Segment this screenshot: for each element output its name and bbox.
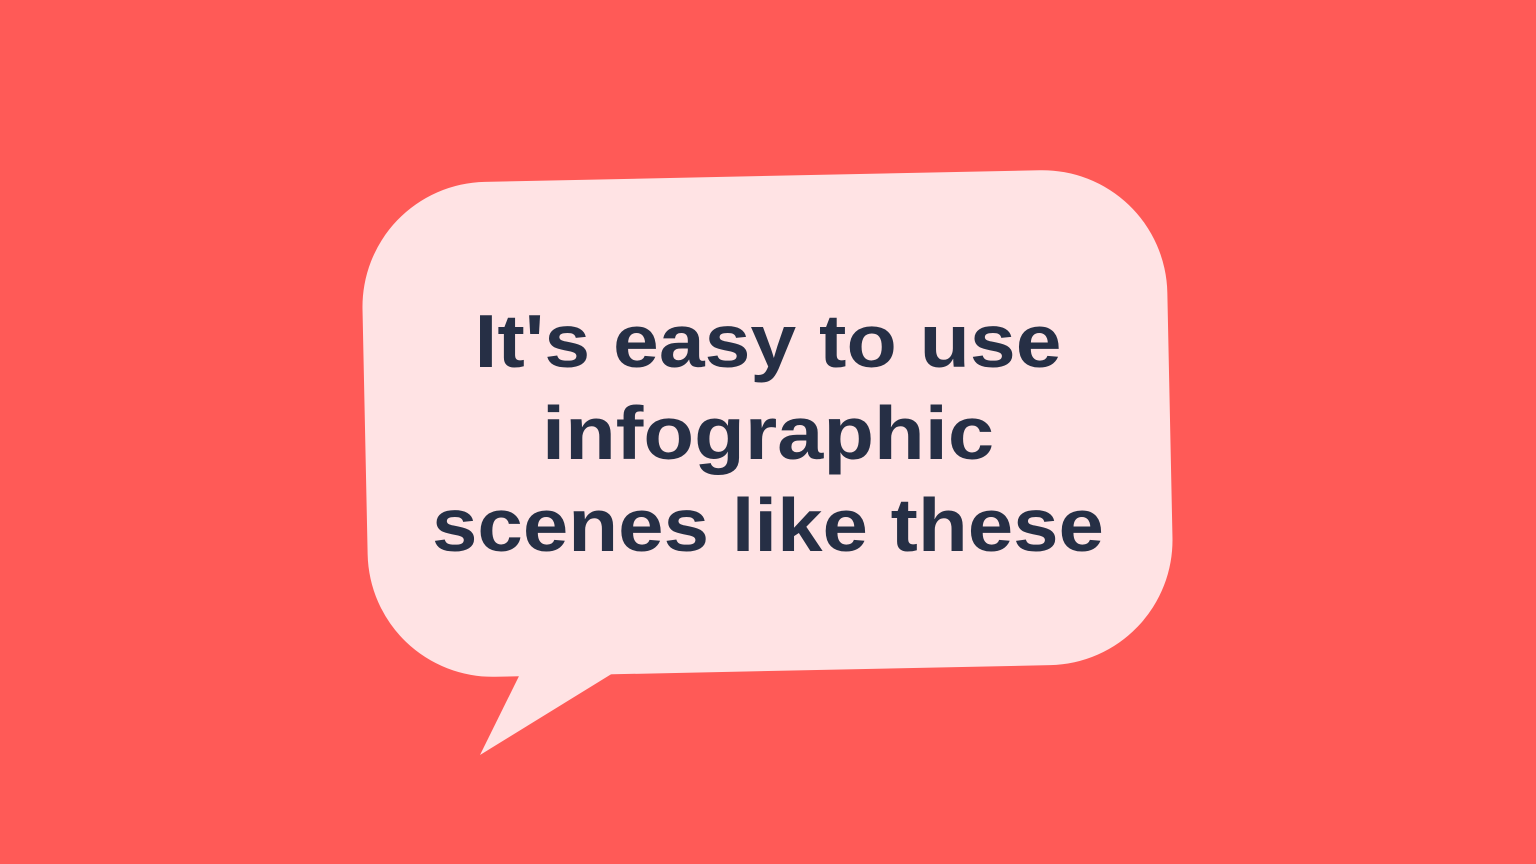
bubble tail	[480, 670, 618, 755]
headline text: scenes like these	[432, 483, 1104, 567]
headline text: infographic	[542, 391, 994, 475]
headline text: It's easy to use	[474, 299, 1062, 383]
headline text	[432, 299, 1104, 567]
bubble body	[360, 168, 1175, 755]
